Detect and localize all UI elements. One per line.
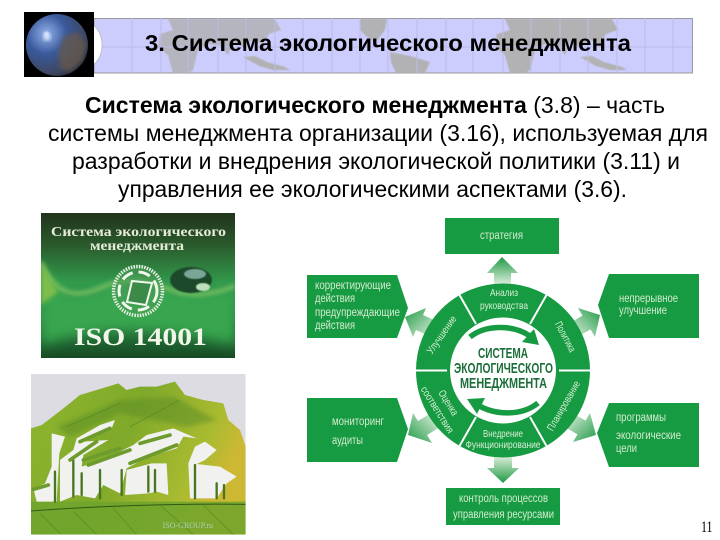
map grid <box>94 18 692 73</box>
definition text block: системы менеджмента организации (3.16), используемая для <box>48 120 708 146</box>
box: corrective actions: корректирующие <box>315 280 391 292</box>
factory silhouette <box>33 420 237 502</box>
ring labels: Оценка <box>435 388 461 418</box>
circular arrow: top <box>470 327 539 345</box>
photo: ISO 14001 cover: менеджмента <box>90 238 184 253</box>
ring labels <box>418 287 583 451</box>
arrow: lower right <box>566 413 596 442</box>
definition text block: Система экологического менеджмента (3.8) – часть <box>85 92 665 118</box>
ring labels: Политика <box>552 320 578 354</box>
definition text block: разработки и внедрения экологической политики (3.11) и <box>72 148 680 174</box>
ring labels: Планирование <box>545 379 583 433</box>
arrow: lower left <box>408 413 439 443</box>
header banner with world map <box>94 18 692 73</box>
ring labels: Улучшение <box>424 313 460 356</box>
ring labels: Анализ <box>490 287 518 299</box>
leaf <box>31 382 246 535</box>
box: strategy <box>445 218 559 254</box>
water drop <box>170 267 212 293</box>
central title <box>454 345 553 392</box>
ring labels: соответствия <box>418 384 456 436</box>
photo: ISO 14001 cover: Система экологического <box>51 224 226 239</box>
box: continual improvement <box>598 274 699 338</box>
ring labels: руководства <box>480 300 528 312</box>
arrow: upper left <box>405 308 436 337</box>
page number: 11 <box>701 519 712 536</box>
smoke and chimneys <box>33 428 224 502</box>
box: continual improvement: непрерывное <box>619 293 678 305</box>
photo: ISO 14001 cover <box>41 213 235 358</box>
box: programmes <box>597 403 699 467</box>
world map continents <box>158 19 627 73</box>
box: continual improvement: улучшение <box>619 305 667 317</box>
definition text block <box>48 92 708 202</box>
arrow: up <box>487 257 518 286</box>
box: process control: управления ресурсами <box>453 509 554 521</box>
central title: СИСТЕМА <box>478 345 528 362</box>
box: corrective actions: действия <box>315 320 355 332</box>
diagram: environmental management system <box>307 218 699 525</box>
definition text block: управления ее экологическими аспектами (3.6). <box>118 176 627 202</box>
box: corrective actions: действия <box>315 293 355 305</box>
box: process control: контроль процессов <box>459 493 548 505</box>
box: programmes: программы <box>616 412 666 424</box>
central title: МЕНЕДЖМЕНТА <box>460 375 547 392</box>
box: corrective actions <box>307 275 408 338</box>
circular arrow: bottom <box>467 398 538 414</box>
arrow: down <box>487 456 519 483</box>
title: 3. Система экологического менеджмента <box>145 30 631 56</box>
box: monitoring <box>307 398 408 462</box>
ring labels: Внедрение <box>483 428 523 440</box>
ring labels: Функционирование <box>466 439 541 451</box>
box: corrective actions: предупреждающие <box>315 307 400 319</box>
arrow: upper right <box>570 308 600 337</box>
box: monitoring: аудиты <box>332 435 363 447</box>
box: programmes: экологические <box>616 430 681 442</box>
photo: leaf with factory cut-out: ISO-GROUP.ru <box>163 521 213 530</box>
ring <box>416 295 590 446</box>
box: programmes: цели <box>616 443 637 455</box>
box: monitoring: мониторинг <box>332 416 384 428</box>
photo: leaf with factory cut-out <box>31 374 246 535</box>
box: strategy: стратегия <box>480 230 523 242</box>
globe icon <box>24 12 102 77</box>
box: process control <box>446 488 560 525</box>
central title: ЭКОЛОГИЧЕСКОГО <box>454 360 553 377</box>
ISO emblem <box>112 265 164 317</box>
photo: ISO 14001 cover: ISO 14001 <box>74 324 207 351</box>
